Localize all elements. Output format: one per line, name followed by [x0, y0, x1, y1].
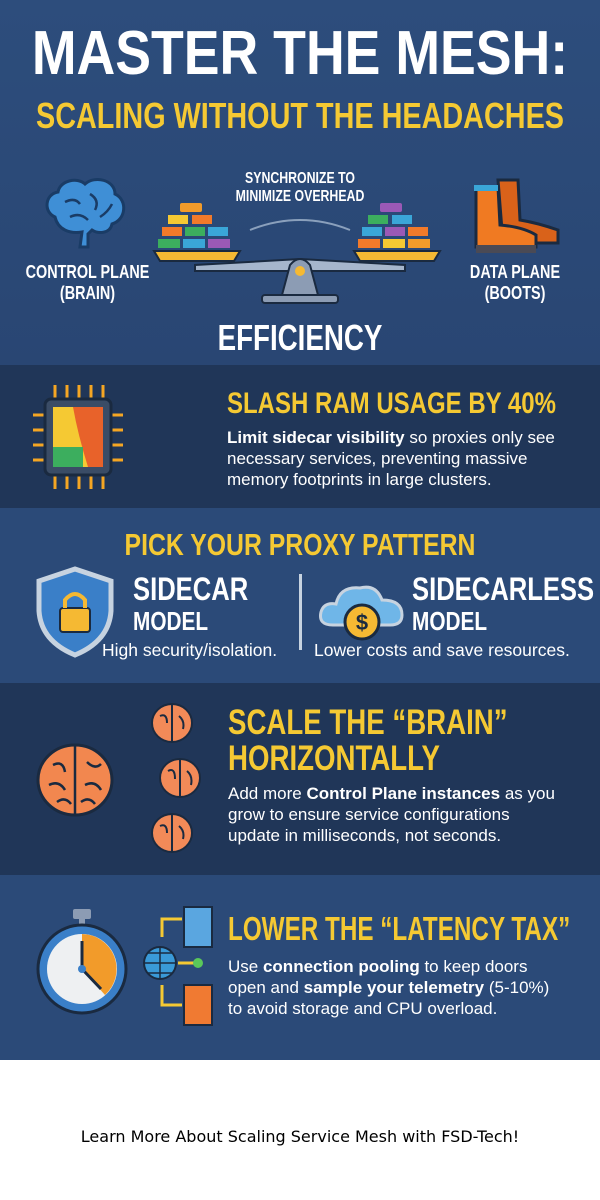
text: synchronize: MINIMIZE OVERHEAD [236, 188, 364, 205]
text: synchronize [236, 170, 364, 205]
heading: scale the brain [228, 703, 508, 778]
icon: cloud coin: $ [356, 610, 368, 635]
text: control plane: CONTROL PLANE [26, 262, 149, 282]
text: data plane: DATA PLANE [470, 262, 560, 282]
text: brain body: Add more Control Plane instances as you grow to ensure service configurations update in milliseconds, not seconds. [228, 784, 555, 845]
text: control plane: (BRAIN) [60, 283, 115, 303]
panel: latency tax [0, 875, 600, 1060]
text: sidecarless desc: Lower costs and save resources. [314, 640, 570, 660]
text: latency body: Use connection pooling to keep doors [228, 957, 527, 976]
panel: scale brain [0, 683, 600, 875]
text: sidecar model: SIDECAR [133, 571, 248, 607]
text: data plane [470, 262, 560, 303]
panel: header [0, 0, 600, 365]
text: sidecarless model: SIDECARLESS [412, 571, 594, 607]
heading: pick your proxy pattern: PICK YOUR PROXY PATTERN [125, 527, 475, 562]
text: efficiency: EFFICIENCY [218, 317, 382, 358]
text: control plane [26, 262, 149, 303]
text: sidecarless model [412, 571, 594, 636]
text: sidecarless model: MODEL [412, 606, 487, 636]
panel: proxy pattern [0, 508, 600, 683]
icon: globe doors [143, 906, 213, 1026]
heading: latency tax: LOWER THE “LATENCY TAX” [228, 910, 570, 947]
icon: balance scale [152, 203, 442, 304]
text: data plane: (BOOTS) [485, 283, 545, 303]
text: RAM body: Limit sidecar visibility so proxies only see necessary services, preventing massive memory footprints in large clusters. [227, 428, 555, 489]
text: latency body: open and sample your telemetry (5-10%) [228, 978, 549, 997]
icon: big brain [36, 744, 114, 816]
icon: cloud coin [319, 586, 404, 640]
icon: shield [36, 566, 114, 658]
icon: boots [474, 178, 560, 253]
panel: slash RAM [0, 365, 600, 508]
icon: chip [33, 385, 123, 489]
text: sidecar desc: High security/isolation. [102, 640, 277, 660]
divider [299, 574, 302, 650]
text: latency body [228, 957, 549, 1018]
text: sidecar model: MODEL [133, 606, 208, 636]
title: MASTER THE MESH: [32, 19, 568, 88]
icon: stopwatch [36, 909, 128, 1014]
text: sidecar model [133, 571, 248, 636]
heading: slash RAM: SLASH RAM USAGE BY 40% [227, 387, 556, 420]
icon: brain [46, 178, 125, 248]
heading: scale the brain: SCALE THE “BRAIN” [228, 703, 508, 742]
text: synchronize: SYNCHRONIZE TO [245, 170, 355, 187]
footer text: Learn More About Scaling Service Mesh with FSD-Tech! [81, 1127, 519, 1146]
heading: scale the brain: HORIZONTALLY [228, 739, 440, 778]
subtitle: SCALING WITHOUT THE HEADACHES [36, 95, 564, 136]
text: latency body: to avoid storage and CPU overload. [228, 999, 497, 1018]
icon: small brains [151, 703, 201, 853]
